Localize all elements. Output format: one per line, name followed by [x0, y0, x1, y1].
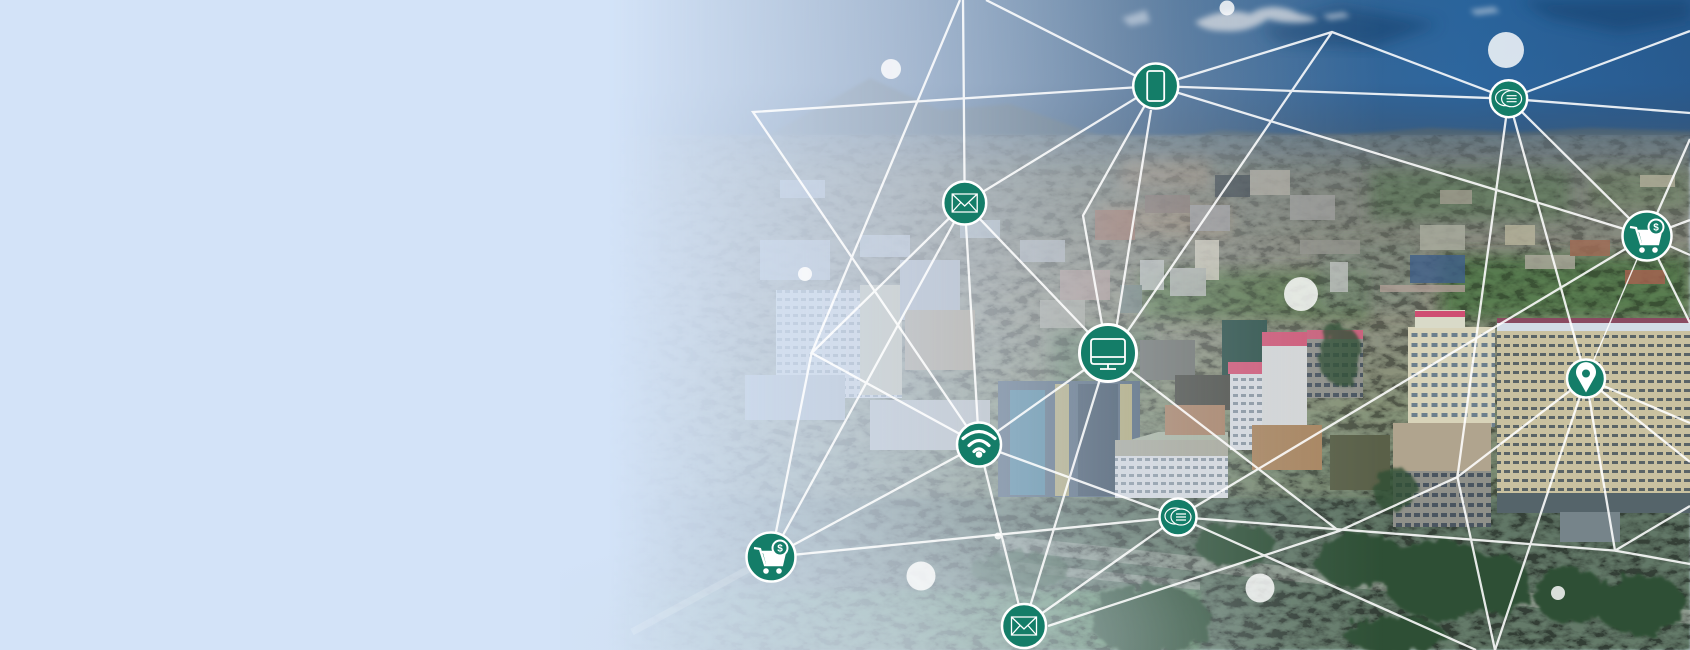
- junction dot: [994, 532, 1002, 540]
- mid-distance blocks: [760, 170, 1675, 328]
- node: chat upper: [1490, 80, 1527, 117]
- node: cart left: $: [777, 544, 783, 554]
- node: email top: [943, 182, 986, 224]
- bottom haze: [560, 400, 1460, 650]
- node: phone: [1133, 64, 1178, 108]
- photo: aerial city: [560, 0, 1690, 650]
- node: cart right: $: [1653, 222, 1659, 234]
- faint light streak: [632, 557, 771, 632]
- city base: [560, 135, 1690, 650]
- node: chat lower: [1160, 498, 1196, 536]
- green and red districts: [1050, 160, 1690, 390]
- node: wifi: [957, 422, 1001, 466]
- mountains: [760, 78, 1690, 162]
- trees foreground: [970, 325, 1685, 650]
- city texture: [848, 135, 1690, 650]
- sky: [560, 0, 1690, 150]
- node: cart right: [1622, 212, 1672, 260]
- node: cart left: [746, 532, 796, 582]
- road: [1000, 535, 1690, 624]
- network lines: [753, 0, 1690, 650]
- node: email bottom: [1002, 604, 1046, 648]
- ground: [560, 498, 1690, 650]
- hero illustration: [629, 0, 1690, 650]
- near buildings: [745, 260, 1690, 542]
- node: monitor: [1080, 324, 1136, 382]
- decorative bubbles: [798, 0, 1565, 602]
- node: location pin: [1567, 360, 1605, 398]
